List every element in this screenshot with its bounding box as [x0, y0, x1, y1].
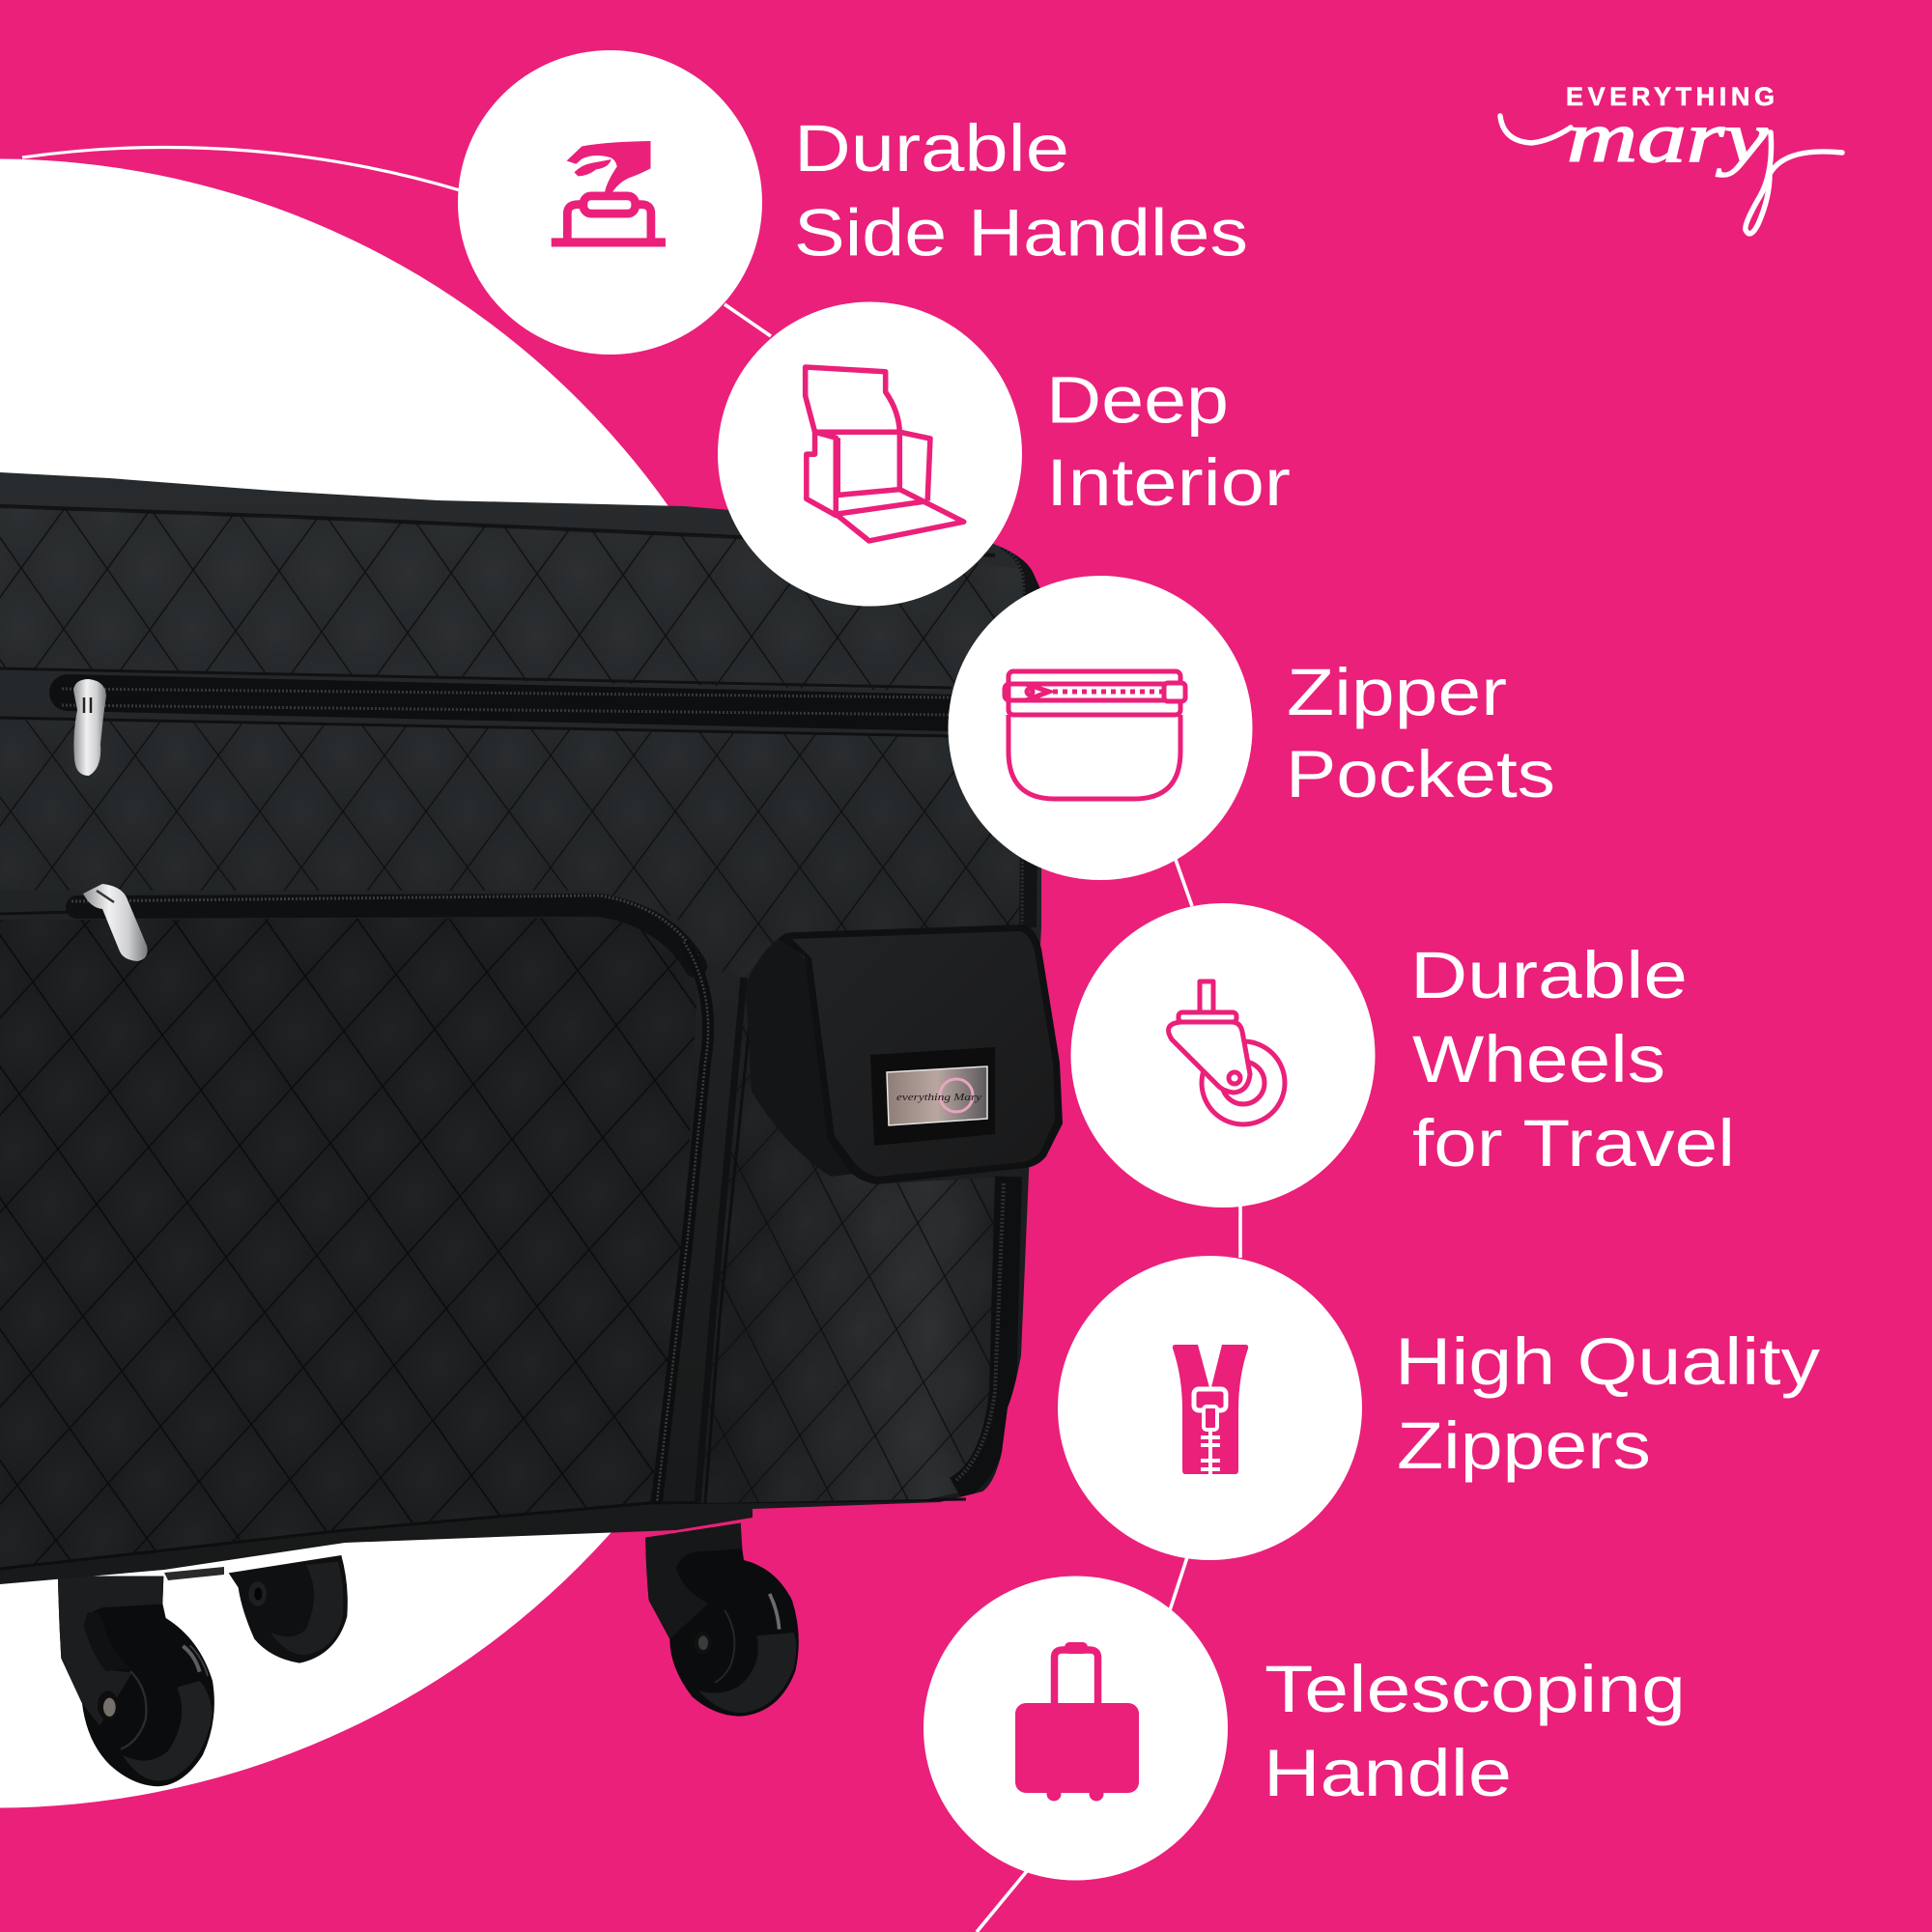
- icon: zipper: [1173, 1345, 1248, 1474]
- label: Zipper: [1287, 655, 1507, 729]
- quilted upper panel: [0, 510, 995, 690]
- label: Durable: [794, 111, 1069, 185]
- label: Interior: [1046, 445, 1291, 520]
- feature 1: durable side handles: [458, 50, 1248, 355]
- front pocket panel: [0, 908, 966, 1584]
- icon: hand on handle: [552, 141, 666, 246]
- lower zipper: [0, 895, 708, 1502]
- circle: [949, 576, 1252, 880]
- connector lines: [22, 147, 1240, 1932]
- white background circle: [0, 158, 821, 1808]
- upper zipper: [0, 668, 952, 736]
- label: Pockets: [1286, 737, 1555, 811]
- feature 2: deep interior: [718, 301, 1291, 607]
- feature 6: telescoping handle: [923, 1577, 1686, 1880]
- icon: zipper pouch: [1005, 671, 1185, 799]
- label: Telescoping: [1264, 1652, 1686, 1726]
- lower zipper pull: [83, 884, 148, 961]
- rolling bag photo illustration: [0, 472, 1063, 1786]
- brand badge on flap: everything Mary: [896, 1093, 982, 1103]
- feature 5: high quality zippers: [1058, 1256, 1821, 1560]
- logo script word: mary: [1567, 99, 1768, 178]
- label: for Travel: [1412, 1106, 1735, 1180]
- side flap: [779, 924, 1063, 1184]
- icon: open bag: [806, 367, 964, 541]
- icon: suitcase with handle: [1015, 1642, 1139, 1801]
- feature 4: durable wheels for travel: [1070, 903, 1735, 1208]
- label: Zippers: [1397, 1408, 1651, 1483]
- label: High Quality: [1395, 1324, 1821, 1399]
- upper zipper pull: [73, 679, 106, 776]
- brand badge on flap: [870, 1047, 995, 1146]
- quilted middle panel: [0, 721, 1020, 972]
- rear left wheel: [229, 1555, 348, 1663]
- bag body: [0, 472, 1041, 1584]
- top piping seam: [0, 506, 995, 555]
- right side zippers: [956, 541, 1032, 1490]
- chassis plate: [164, 1567, 224, 1580]
- label: Wheels: [1412, 1022, 1665, 1096]
- logo wordmark top: EVERYTHING: [1566, 82, 1775, 111]
- label: Handle: [1264, 1736, 1512, 1810]
- icon: caster wheel: [1169, 981, 1285, 1124]
- front right wheel: [645, 1523, 799, 1717]
- circle: [1058, 1256, 1362, 1560]
- front left wheel: [58, 1577, 214, 1786]
- circle: [1070, 903, 1376, 1208]
- feature 3: zipper pockets: [949, 576, 1555, 880]
- label: Durable: [1410, 938, 1688, 1012]
- label: Deep: [1046, 363, 1229, 437]
- circle: [458, 50, 762, 355]
- side pocket panel: [696, 927, 1014, 1507]
- circle: [718, 301, 1022, 607]
- label: Side Handles: [794, 195, 1248, 270]
- logo flourish: [1500, 116, 1842, 234]
- logo: everything mary: [1500, 82, 1842, 234]
- circle: [923, 1577, 1228, 1880]
